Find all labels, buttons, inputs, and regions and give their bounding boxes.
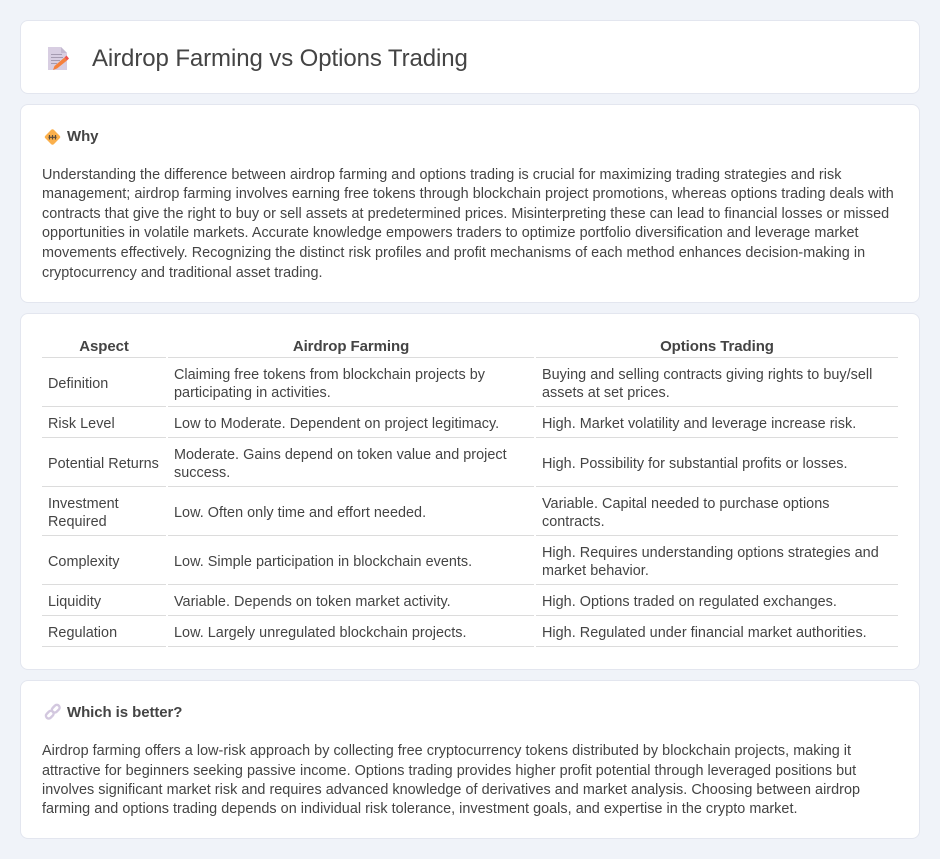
row: investment required: Investment [48,496,119,512]
table header: Aspect [79,338,129,355]
why paragraph: Understanding the difference between airdrop farming and options trading is crucial for maximizing trading strategies and risk [42,167,841,183]
heading: which is better: Which is better? [67,704,182,721]
row: definition [42,367,898,407]
row: regulation: Regulation [48,625,117,641]
row: regulation: High. Regulated under financial market authorities. [542,625,867,641]
row: regulation [42,625,898,647]
row: liquidity: High. Options traded on regulated exchanges. [542,594,837,610]
row: risk level: Risk Level [48,416,115,432]
row: definition: Buying and selling contracts giving rights to buy/sell [542,367,872,383]
why paragraph: cryptocurrency and traditional asset trading. [42,265,323,281]
panel: comparison table [20,313,920,670]
row: investment required: Required [48,514,107,530]
row: investment required: Low. Often only time and effort needed. [174,505,426,521]
why paragraph [42,167,894,281]
row: risk level: Low to Moderate. Dependent on project legitimacy. [174,416,499,432]
panel: title [20,20,920,94]
icon: warning diamond [44,129,60,145]
row: liquidity [42,594,898,616]
row: definition: Claiming free tokens from blockchain projects by [174,367,485,383]
table header: Options Trading [660,338,774,355]
row: definition: Definition [48,376,108,392]
row: risk level [42,416,898,438]
table header: Airdrop Farming [293,338,409,355]
row: definition: assets at set prices. [542,385,670,401]
row: complexity: market behavior. [542,563,649,579]
row: investment required: contracts. [542,514,605,530]
row: investment required: Variable. Capital needed to purchase options [542,496,829,512]
row: liquidity: Variable. Depends on token market activity. [174,594,451,610]
row: potential returns: success. [174,465,230,481]
row: definition: participating in activities. [174,385,331,401]
row: potential returns: Potential Returns [48,456,159,472]
row: risk level: High. Market volatility and leverage increase risk. [542,416,856,432]
conclusion paragraph: farming and options trading depends on individual risk tolerance, investment goals, and expertise in the crypto market. [42,801,798,817]
row: potential returns [42,447,898,487]
why paragraph: movements effectively. Recognizing the distinct risk profiles and profit mechanisms of each method enhances decision-making in [42,245,865,261]
row: complexity: Complexity [48,554,119,570]
icon: link [44,704,61,720]
row: complexity [42,545,898,585]
conclusion paragraph [42,743,860,817]
panel: why [20,104,920,303]
row: investment required [42,496,898,536]
title heading: Airdrop Farming vs Options Trading [92,45,468,72]
row: liquidity: Liquidity [48,594,101,610]
row: potential returns: High. Possibility for substantial profits or losses. [542,456,848,472]
why paragraph: opportunities in volatile markets. Accurate knowledge empowers traders to optimize portfolio diversification and leverage market [42,225,859,241]
heading: why: Why [67,128,98,145]
panel: which is better [20,680,920,839]
row: potential returns: Moderate. Gains depend on token value and project [174,447,507,463]
row: complexity: Low. Simple participation in blockchain events. [174,554,472,570]
why paragraph: management; airdrop farming involves earning free tokens through blockchain project promotions, whereas options trading deals with [42,186,894,202]
row: regulation: Low. Largely unregulated blockchain projects. [174,625,467,641]
table header [42,338,898,358]
icon: document with pencil [48,47,69,70]
row: complexity: High. Requires understanding options strategies and [542,545,879,561]
why paragraph: contracts that give the right to buy or sell assets at predetermined prices. Misinterpreting these can lead to financial losses or missed [42,206,889,222]
conclusion paragraph: attractive for beginners seeking passive income. Options trading provides higher profit potential through leveraged positions but [42,763,856,779]
conclusion paragraph: involves significant market risk and requires advanced knowledge of derivatives and market analysis. Choosing between airdrop [42,782,860,798]
conclusion paragraph: Airdrop farming offers a low-risk approach by collecting free cryptocurrency tokens distributed by blockchain projects, making it [42,743,851,759]
